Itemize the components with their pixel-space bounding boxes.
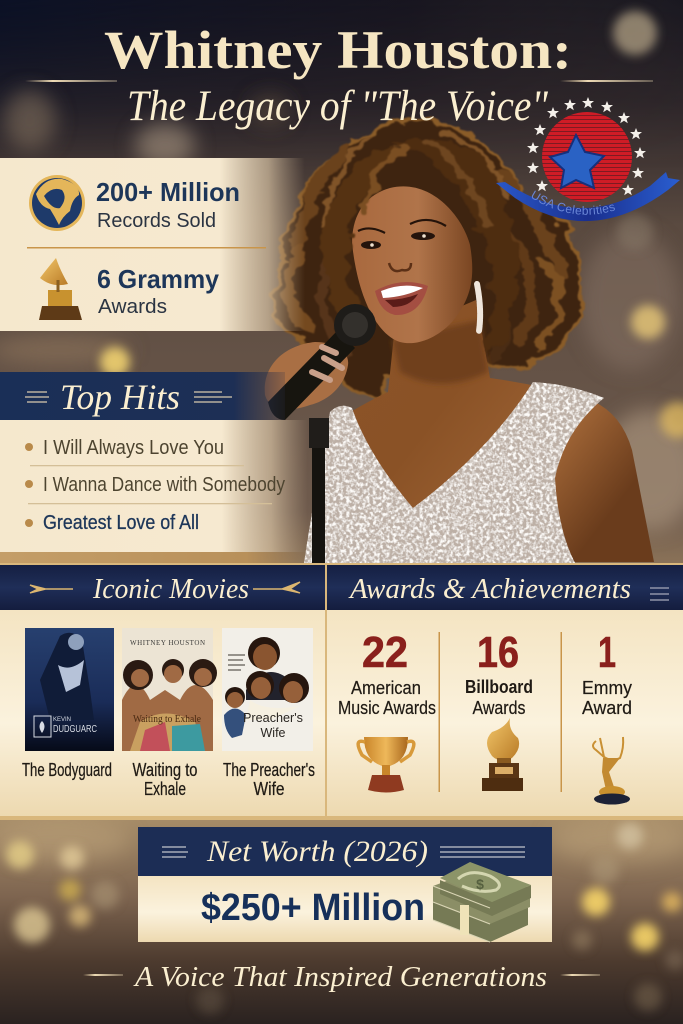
- icon: emmy statuette: [593, 737, 630, 804]
- title: Whitney Houston:: [104, 20, 572, 80]
- icon: flame trophy: [482, 718, 523, 791]
- icon: stack of cash: [433, 862, 531, 942]
- hair back: [274, 120, 583, 396]
- stat: billboard awards: Awards: [472, 698, 526, 718]
- eyes and brows: [358, 220, 446, 249]
- stat: billboard awards: 16: [477, 628, 519, 677]
- stat: records sold: 200+ Million: [96, 177, 240, 207]
- poster: The Bodyguard: KEVIN: [53, 717, 71, 723]
- stat: records sold: Records Sold: [97, 210, 216, 232]
- logo: USA Celebrities: [496, 97, 680, 222]
- poster: The Preacher's Wife: Wife: [260, 726, 286, 740]
- heading band: [0, 565, 325, 610]
- footer tagline: A Voice That Inspired Generations: [133, 961, 547, 993]
- heading band: [327, 565, 683, 610]
- stat: billboard awards: [465, 628, 533, 791]
- panel: awards and achievements: [327, 565, 683, 816]
- heading band: [138, 827, 552, 876]
- panel: net worth: [138, 827, 552, 942]
- mouth: [375, 282, 428, 315]
- ribbon text: USA Celebrities: [532, 190, 615, 215]
- icon: trophy cup: [358, 737, 414, 792]
- movie titles: [22, 760, 315, 799]
- stat: records sold: [96, 177, 240, 232]
- subtitle: The Legacy of "The Voice": [127, 83, 549, 130]
- movie titles: Wife: [254, 779, 284, 799]
- movie titles: Waiting to: [132, 760, 198, 780]
- hair front: [321, 130, 517, 352]
- earring: [477, 284, 480, 331]
- microphone: [268, 304, 376, 420]
- poster: Waiting to Exhale: Waiting to Exhale: [133, 714, 202, 725]
- poster: Waiting to Exhale: [122, 628, 217, 751]
- nose: [389, 263, 411, 271]
- stat: american music awards: 22: [362, 628, 408, 677]
- poster: The Bodyguard: DUDGUARC: [53, 724, 97, 735]
- stat: billboard awards: Billboard: [465, 677, 533, 697]
- hand: [265, 342, 348, 409]
- stat: emmy award: Emmy: [582, 678, 632, 698]
- poster: The Preacher's Wife: [222, 628, 313, 751]
- net worth value: $250+ Million: [201, 887, 425, 929]
- panel: top hits: [0, 372, 308, 563]
- heading band: [0, 372, 285, 420]
- hit 2: I Wanna Dance with Somebody: [43, 474, 285, 496]
- panel: key stats: [0, 158, 305, 331]
- title rule right: [560, 80, 653, 82]
- heading band: Awards & Achievements: [348, 573, 631, 605]
- poster: Waiting to Exhale: WHITNEY HOUSTON: [130, 639, 205, 647]
- title rule left: [25, 80, 117, 82]
- movie titles: The Preacher's: [223, 760, 315, 780]
- portrait: singer with microphone: [265, 120, 654, 565]
- stat: american music awards: Music Awards: [338, 698, 436, 718]
- stat: emmy award: 1: [598, 628, 616, 677]
- heading band: Top Hits: [60, 377, 180, 417]
- panel: iconic movies: [0, 563, 683, 820]
- face: [352, 186, 472, 343]
- heading band: Iconic Movies: [92, 573, 249, 605]
- stat: american music awards: [338, 628, 436, 792]
- stat: grammy awards: 6 Grammy: [97, 264, 220, 294]
- movie titles: The Bodyguard: [22, 760, 112, 780]
- stat: grammy awards: [97, 264, 220, 318]
- stat: emmy award: Award: [582, 698, 632, 718]
- dress with sequins: [304, 382, 604, 563]
- icon: globe: [29, 175, 85, 231]
- stat: american music awards: American: [351, 678, 421, 698]
- poster: The Bodyguard: [25, 628, 114, 751]
- hit 3: Greatest Love of All: [43, 512, 199, 534]
- hit 1: I Will Always Love You: [43, 437, 224, 459]
- poster: The Preacher's Wife: Preacher's: [243, 711, 303, 725]
- movie titles: Exhale: [144, 779, 186, 799]
- neck shadow: [392, 320, 488, 384]
- fingers: [312, 347, 342, 380]
- stat: emmy award: [582, 628, 632, 804]
- stat: grammy awards: Awards: [98, 296, 167, 318]
- heading band: Net Worth (2026): [206, 835, 428, 868]
- icon: stack of cash: $: [476, 876, 484, 892]
- icon: grammy: [39, 258, 82, 320]
- chest and arm: [318, 300, 654, 562]
- microphone stand: [309, 418, 329, 565]
